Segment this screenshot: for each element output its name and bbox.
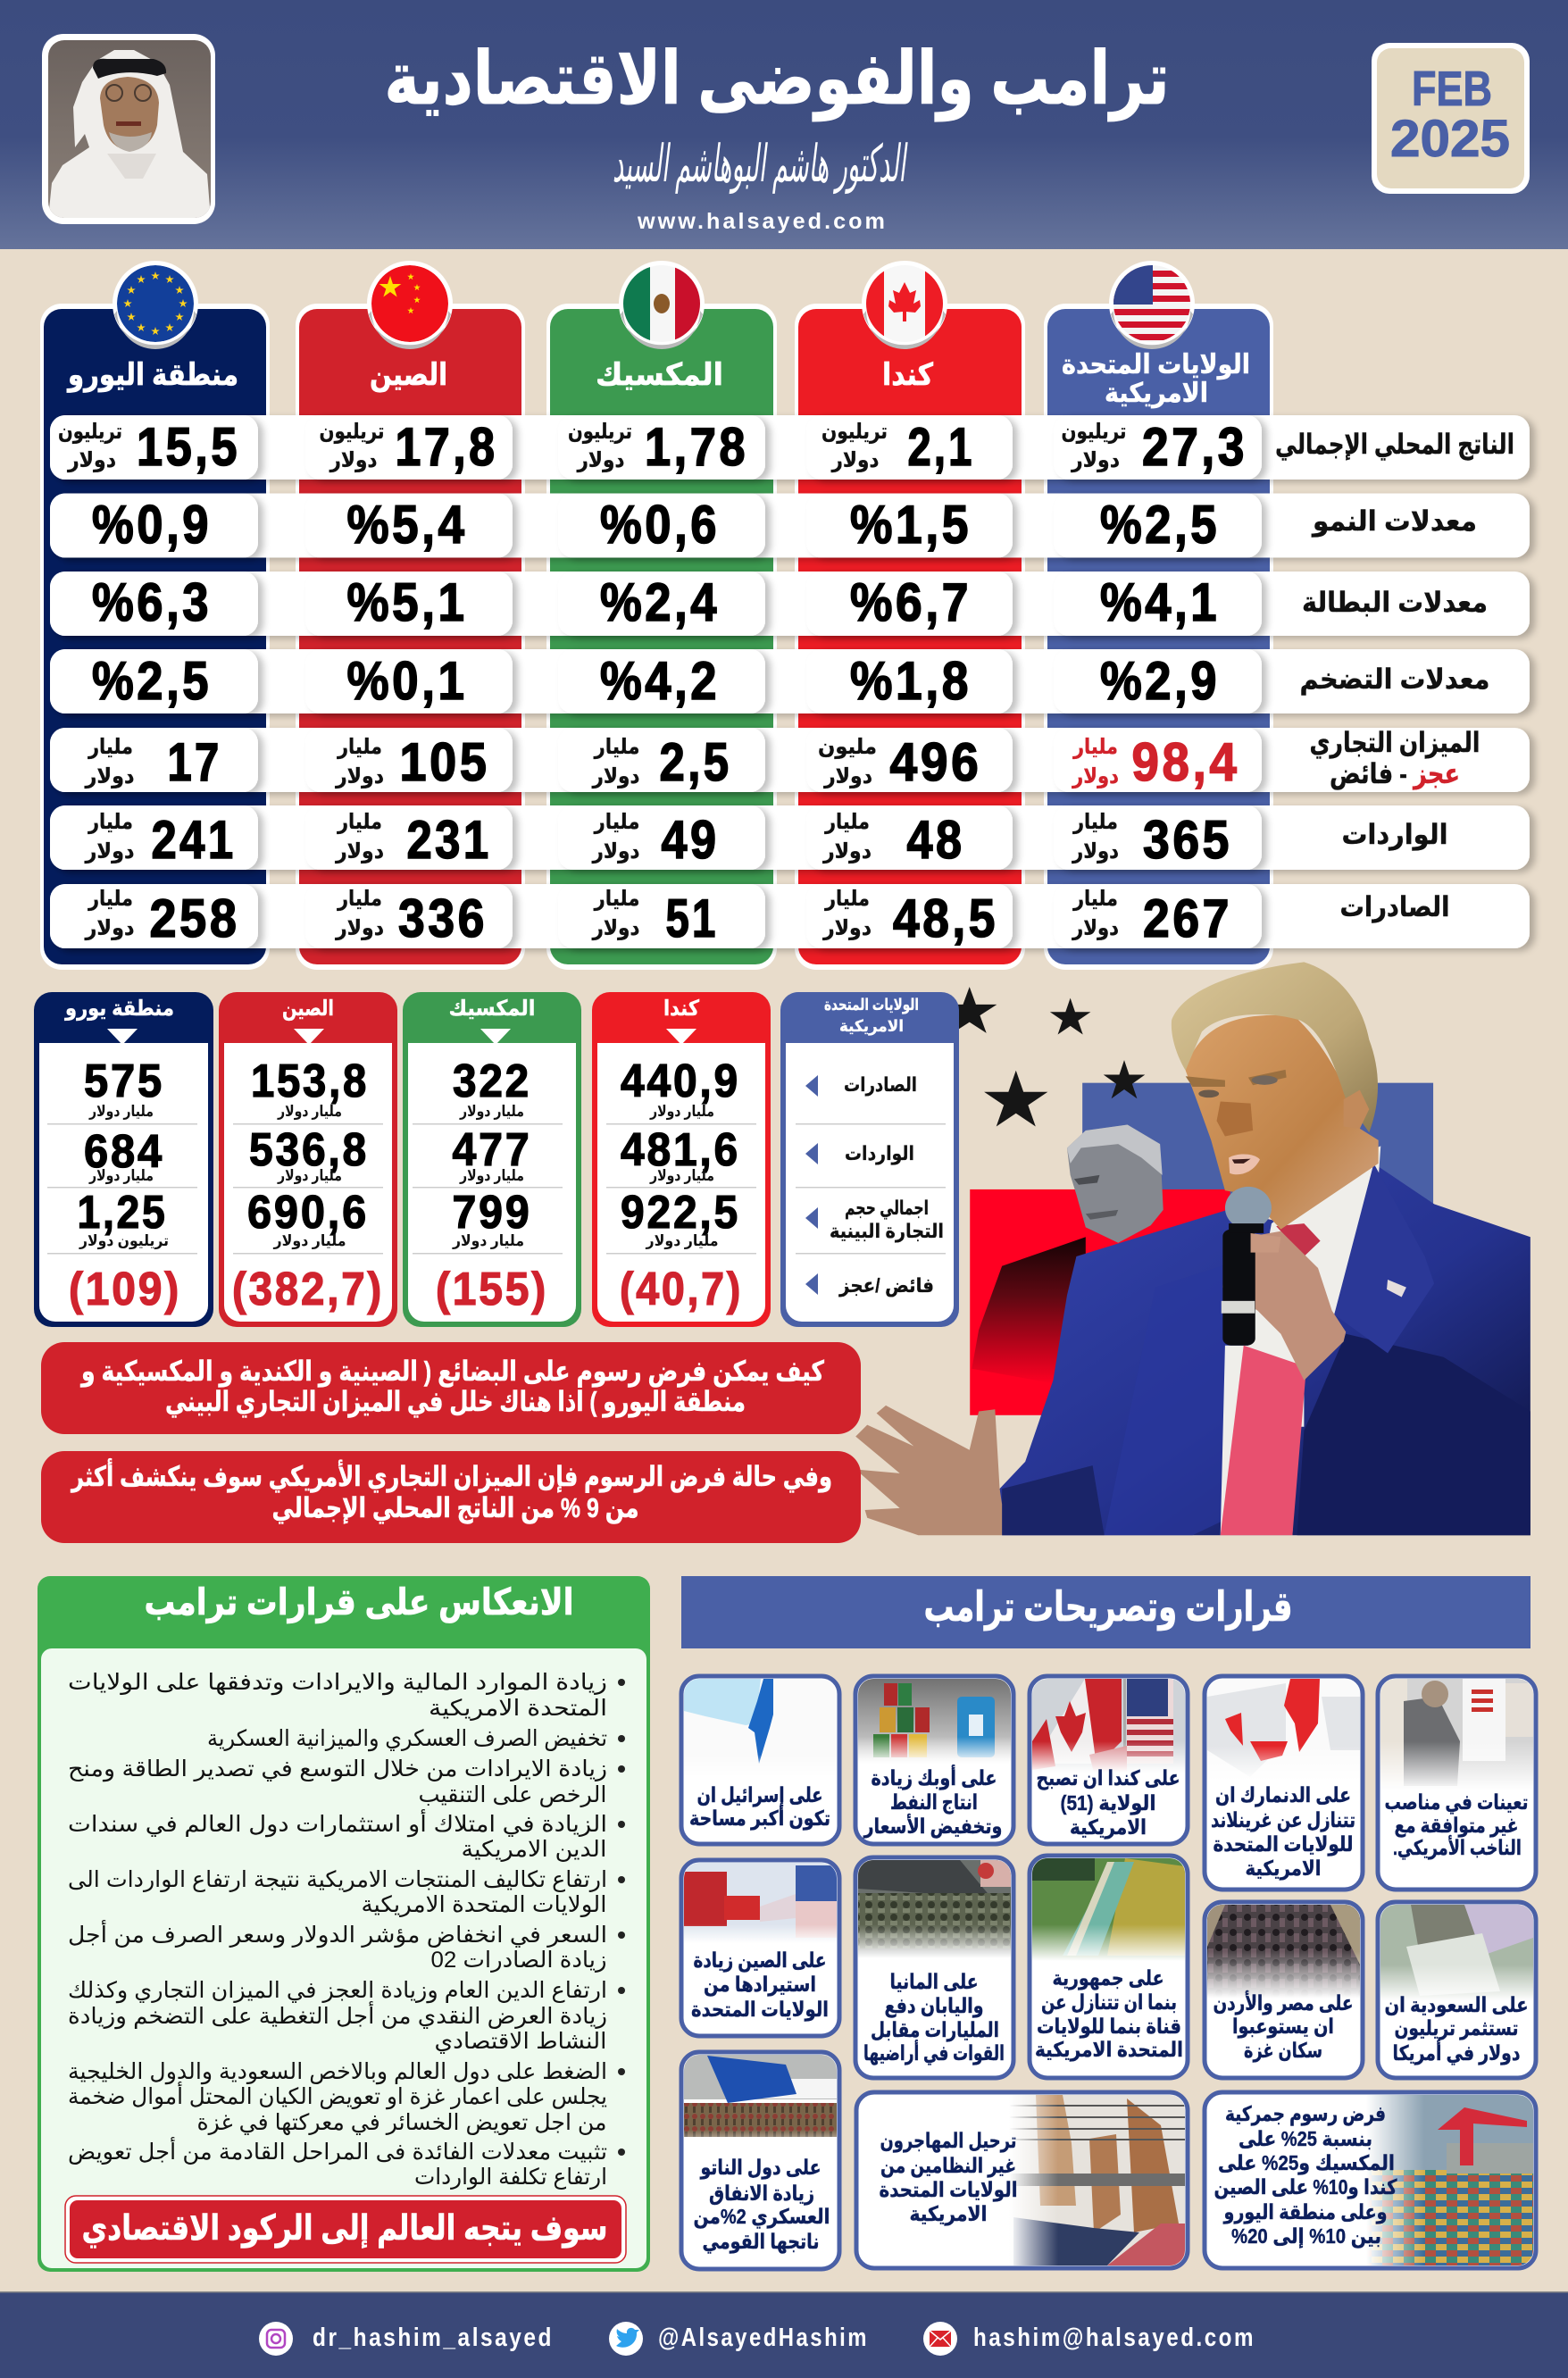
- table: mexico: مليار دولار: [459, 1167, 524, 1185]
- bullet list: تثبيت معدلات الفائدة فى المراحل القادمة من أجل تعويض: [68, 2136, 607, 2165]
- row 6: imports: دولار: [822, 839, 872, 864]
- icon: twitter: [609, 2322, 643, 2356]
- row 3: unemployment: [50, 572, 1530, 636]
- trade tables: [34, 992, 959, 1327]
- row 7: exports: مليار: [337, 887, 382, 911]
- row 6: imports: 231: [407, 810, 491, 870]
- bullet list: المتحدة الامريكية: [429, 1696, 607, 1721]
- card: deporting migrants: ترحيل المهاجرون: [880, 2129, 1016, 2153]
- row 1: gdp: [50, 415, 1530, 480]
- row 1: gdp: 17,8: [395, 417, 498, 477]
- panel: impact of decisions: [38, 1576, 650, 2272]
- column: united states: الولايات المتحدة: [1062, 350, 1250, 380]
- card: appointments: تعينات في مناصب: [1384, 1790, 1529, 1815]
- row 6: imports: دولار: [85, 839, 134, 864]
- row 7: exports: [50, 884, 1530, 948]
- card: appointments: [1378, 1676, 1536, 1890]
- card: opec: [855, 1676, 1013, 1844]
- table: usa labels: الولايات المتحدة: [824, 996, 919, 1014]
- row 5: trade balance: 496: [889, 732, 982, 792]
- card: saudi investment: على السعودية ان: [1384, 1993, 1529, 2017]
- row 1: gdp: 15,5: [137, 417, 240, 477]
- card: germany japan: القوات في أراضيها: [863, 2039, 1005, 2065]
- row 5: trade balance: دولار: [823, 764, 872, 788]
- flag: european union: [113, 261, 198, 349]
- date badge: FEB: [1412, 61, 1492, 116]
- row 3: unemployment: %4,1: [1100, 572, 1220, 632]
- row 3: unemployment: معدلات البطالة: [1302, 587, 1488, 618]
- heading: decisions and statements: قرارات وتصريحات ترامب: [923, 1583, 1293, 1631]
- card: nato: [681, 2052, 839, 2269]
- card: panama canal: المتحدة الامريكية: [1035, 2038, 1183, 2062]
- row 5: trade balance: دولار: [1072, 764, 1119, 788]
- row 7: exports: 336: [398, 889, 488, 948]
- row 7: exports: 267: [1143, 889, 1232, 948]
- row 7: exports: دولار: [85, 916, 134, 940]
- card: customs tariffs: [1205, 2092, 1536, 2268]
- row 4: inflation: %4,2: [600, 651, 720, 711]
- table: canada: كندا: [663, 997, 699, 1021]
- conclusion banner: [65, 2196, 626, 2263]
- row 5: trade balance: مليار: [1072, 735, 1118, 759]
- email address: hashim@halsayed.com: [973, 2324, 1255, 2352]
- table: china: مليار دولار: [277, 1167, 342, 1185]
- column: united states: الامريكية: [1105, 379, 1208, 408]
- card: china imports: على الصين زيادة: [693, 1948, 827, 1973]
- bullet list: تخفيض الصرف العسكري والميزانية العسكرية: [207, 1726, 607, 1752]
- table: usa labels: التجارة البينية: [830, 1220, 944, 1242]
- instagram handle: dr_hashim_alsayed: [313, 2324, 554, 2352]
- flag: china: [367, 261, 453, 349]
- card: germany japan: المليارات مقابل: [871, 2018, 999, 2042]
- card: opec: وتخفيض الأسعار: [863, 1813, 1002, 1839]
- card: saudi investment: [1378, 1902, 1536, 2078]
- row 5: trade balance: 17: [168, 732, 221, 792]
- column: canada: كندا: [882, 358, 933, 392]
- table: usa labels: اجمالي حجم: [845, 1197, 929, 1220]
- row 3: unemployment: %6,3: [92, 572, 212, 632]
- table: usa labels: الامريكية: [839, 1017, 904, 1036]
- card: opec: على أوبك زيادة: [872, 1764, 997, 1790]
- row 1: gdp: تريليون: [568, 420, 632, 444]
- card: egypt jordan: [1205, 1902, 1363, 2078]
- callout: tariffs question: [41, 1342, 861, 1434]
- row 2: growth: %1,5: [850, 495, 972, 555]
- row 1: gdp: دولار: [831, 448, 879, 472]
- table: usa labels: [780, 992, 959, 1327]
- row 5: trade balance: مليار: [337, 735, 382, 759]
- table: mexico: 799: [452, 1187, 532, 1239]
- row 5: trade balance: [50, 727, 1530, 792]
- bullet list: ارتفاع الدين العام وزيادة العجز في الميزان التجاري وكذلك: [68, 1978, 607, 2004]
- row 6: imports: دولار: [592, 839, 639, 864]
- table: mexico: 477: [452, 1124, 532, 1176]
- bullet list: زيادة العرض النقدي من أجل التغطية على التضخم وزيادة: [68, 2000, 607, 2030]
- row 2: growth: [50, 493, 1530, 557]
- table: china: [219, 992, 397, 1327]
- card: deporting migrants: غير النظامين من: [880, 2154, 1016, 2178]
- portrait photo: [42, 34, 215, 224]
- row 5: trade balance: 105: [400, 732, 489, 792]
- trump photo composition: [855, 962, 1530, 1535]
- table: euro zone: (109): [69, 1264, 181, 1315]
- row 5: trade balance: 2,5: [659, 732, 732, 792]
- date badge: [1372, 43, 1530, 194]
- footer: [0, 2291, 1568, 2378]
- row 7: exports: مليار: [594, 887, 639, 911]
- card: panama canal: بنما ان تتنازل عن: [1041, 1990, 1177, 2015]
- card: israel: [681, 1676, 839, 1844]
- bullet list: زيادة الايرادات من خلال التوسع في تصدير الطاقة ومنح: [68, 1756, 607, 1782]
- card: panama canal: على جمهورية: [1052, 1966, 1164, 1990]
- card: canada 51st state: على كندا ان تصبح: [1036, 1766, 1180, 1790]
- card: egypt jordan: سكان غزة: [1244, 2039, 1322, 2063]
- table: mexico: 322: [453, 1055, 531, 1107]
- row 7: exports: 258: [150, 889, 239, 948]
- comparison table: [40, 261, 1530, 970]
- column: china: [296, 304, 525, 970]
- column: euro zone: منطقة اليورو: [66, 358, 238, 393]
- row 1: gdp: 27,3: [1142, 417, 1247, 477]
- card: saudi investment: تستثمر تريليون: [1395, 2016, 1518, 2040]
- callout: trade balance warning: وفي حالة فرض الرسوم فإن الميزان التجاري الأمريكي سوف ينكشف أكثر: [70, 1458, 832, 1493]
- row 7: exports: دولار: [822, 916, 872, 940]
- row 4: inflation: %2,9: [1100, 651, 1220, 711]
- column: euro zone: [40, 304, 270, 970]
- panel heading: الانعكاس على قرارات ترامب: [145, 1581, 573, 1623]
- card: customs tariffs: المكسيك و25% على: [1218, 2151, 1395, 2175]
- card: israel: تكون أكبر مساحة: [689, 1804, 830, 1831]
- column: canada: [795, 304, 1025, 970]
- row 5: trade balance: الميزان التجاري: [1309, 727, 1480, 759]
- table: mexico: المكسيك: [448, 997, 536, 1021]
- table: canada: 440,9: [621, 1055, 740, 1107]
- card: germany japan: [855, 1857, 1013, 2078]
- twitter handle: @AlsayedHashim: [658, 2324, 869, 2352]
- row 1: gdp: تريليون: [58, 420, 122, 444]
- row 7: exports: مليار: [824, 887, 870, 911]
- row 6: imports: دولار: [335, 839, 384, 864]
- bullet list: زيادة الصادرات 02: [430, 1948, 607, 1973]
- row 5: trade balance: مليار: [88, 735, 133, 759]
- card: nato: العسكري 2%من: [693, 2205, 830, 2229]
- callout: tariffs question: منطقة اليورو ) اذا هناك خلل في الميزان التجاري البيني: [165, 1386, 746, 1418]
- card: deporting migrants: [856, 2092, 1188, 2268]
- row 5: trade balance: دولار: [592, 764, 639, 788]
- bullet list: الضغط على دول العالم وبالاخص السعودية والدول الخليجية: [68, 2059, 607, 2085]
- row 4: inflation: %1,8: [850, 651, 972, 711]
- row 5: trade balance: مليار: [594, 735, 639, 759]
- row 3: unemployment: %5,1: [346, 572, 468, 632]
- table: china: (382,7): [232, 1264, 384, 1315]
- row 4: inflation: %2,5: [92, 651, 212, 711]
- table: usa labels: فائض /عجز: [838, 1274, 934, 1297]
- table: usa labels: الصادرات: [844, 1073, 917, 1096]
- table: china: الصين: [282, 997, 334, 1021]
- column: china: الصين: [370, 358, 447, 393]
- card: customs tariffs: فرض رسوم جمركية: [1225, 2102, 1386, 2126]
- card: egypt jordan: ان يستوعبوا: [1232, 2015, 1334, 2039]
- table: euro zone: 684: [84, 1126, 164, 1178]
- row 1: gdp: دولار: [329, 448, 377, 472]
- card: canada 51st state: الامريكية: [1070, 1815, 1147, 1840]
- row 6: imports: 49: [661, 810, 720, 870]
- row 6: imports: 365: [1143, 810, 1232, 870]
- icon: instagram: [259, 2322, 293, 2356]
- bullet list: النشاط الاقتصادي: [434, 2029, 607, 2054]
- website: www.halsayed.com: [637, 209, 888, 234]
- row 1: gdp: 1,78: [645, 417, 748, 477]
- table: euro zone: 1,25: [77, 1187, 168, 1239]
- table: mexico: مليار دولار: [459, 1103, 524, 1121]
- row 7: exports: مليار: [1072, 887, 1118, 911]
- card: germany japan: واليابان دفع: [884, 1994, 984, 2018]
- row 7: exports: الصادرات: [1339, 891, 1450, 923]
- row 6: imports: مليار: [1072, 810, 1118, 834]
- bullet list: [68, 1670, 625, 2190]
- bullet list: من اجل تعويض الخسائر في معركتها في غزة: [196, 2110, 607, 2136]
- row 2: growth: %2,5: [1100, 495, 1220, 555]
- row 1: gdp: دولار: [577, 448, 625, 472]
- row 7: exports: دولار: [592, 916, 639, 940]
- card: appointments: الناخب الأمريكي.: [1393, 1834, 1522, 1860]
- card: customs tariffs: وعلى منطقة اليورو: [1223, 2200, 1388, 2224]
- callout: trade balance warning: [41, 1451, 861, 1543]
- header band: [0, 0, 1568, 249]
- flag: usa: [1109, 261, 1195, 349]
- row 5: trade balance: مليون: [818, 735, 877, 759]
- card: china imports: استيرادها من: [704, 1973, 816, 1997]
- callout: trade balance warning: من 9 % من الناتج المحلي الإجمالي: [271, 1492, 639, 1524]
- row 1: gdp: دولار: [1071, 448, 1120, 472]
- row 4: inflation: معدلات التضخم: [1300, 663, 1489, 696]
- row 7: exports: دولار: [1072, 916, 1119, 940]
- table: euro zone: مليار دولار: [88, 1167, 154, 1185]
- row 2: growth: %0,9: [92, 495, 212, 555]
- row 2: growth: %0,6: [600, 495, 720, 555]
- row 2: growth: %5,4: [346, 495, 468, 555]
- row 7: exports: دولار: [335, 916, 384, 940]
- column: mexico: [546, 304, 777, 970]
- bullet list: الولايات المتحدة الامريكية: [361, 1892, 607, 1917]
- bullet list: الزيادة في امتلاك أو استثمارات دول العالم في سندات: [68, 1808, 607, 1838]
- card: nato: على دول الناتو: [700, 2156, 822, 2180]
- card: customs tariffs: كندا و10% على الصين: [1214, 2175, 1397, 2199]
- card: denmark greenland: الامريكية: [1245, 1857, 1322, 1881]
- table: euro zone: مليار دولار: [88, 1103, 154, 1121]
- row 6: imports: مليار: [88, 810, 133, 834]
- table: mexico: [403, 992, 581, 1327]
- row 7: exports: 51: [666, 889, 718, 948]
- table: euro zone: [34, 992, 213, 1327]
- card: appointments: غير متوافقة مع: [1395, 1814, 1518, 1838]
- date badge: 2025: [1390, 110, 1510, 168]
- card: israel: على إسرائيل ان: [696, 1783, 823, 1807]
- flag: canada: [862, 261, 947, 349]
- row 7: exports: 48,5: [893, 889, 998, 948]
- bullet list: ارتفاع تكاليف المنتجات الامريكية نتيجة ارتفاع الواردات الى: [68, 1867, 607, 1892]
- row 1: gdp: 2,1: [907, 417, 975, 477]
- card: nato: ناتجها القومي: [702, 2230, 820, 2254]
- title: ترامب والفوضى الاقتصادية: [384, 38, 1170, 122]
- card: egypt jordan: على مصر والأردن: [1213, 1990, 1354, 2015]
- card: germany japan: على المانيا: [889, 1970, 979, 1993]
- table: canada: مليار دولار: [649, 1103, 714, 1121]
- table: mexico: مليار دولار: [452, 1232, 524, 1250]
- card: panama canal: [1030, 1856, 1188, 2078]
- table: usa labels: الواردات: [845, 1142, 914, 1165]
- table: china: مليار دولار: [273, 1232, 346, 1250]
- row 5: trade balance: دولار: [335, 764, 384, 788]
- bullet list: ارتفاع تكلفة الواردات: [414, 2165, 607, 2190]
- column: united states: [1044, 304, 1273, 970]
- bullet list: السعر في انخفاض مؤشر الدولار وسعر الصرف من أجل: [68, 1919, 607, 1948]
- card: canada 51st state: الولاية (51): [1061, 1791, 1155, 1815]
- table: mexico: (155): [436, 1264, 548, 1315]
- row 6: imports: [50, 805, 1530, 870]
- table: china: 690,6: [247, 1187, 369, 1239]
- table: canada: (40,7): [620, 1264, 743, 1315]
- row 4: inflation: [50, 649, 1530, 713]
- row 6: imports: مليار: [594, 810, 639, 834]
- row 1: gdp: دولار: [67, 448, 116, 472]
- table: canada: [592, 992, 771, 1327]
- row 3: unemployment: %2,4: [600, 572, 720, 632]
- column: mexico: المكسيك: [596, 358, 723, 392]
- card: deporting migrants: الامريكية: [909, 2202, 988, 2226]
- row 6: imports: مليار: [337, 810, 382, 834]
- table: china: مليار دولار: [277, 1103, 342, 1121]
- table: canada: 481,6: [621, 1124, 740, 1176]
- row 6: imports: 48: [907, 810, 964, 870]
- card: denmark greenland: على الدنمارك ان: [1215, 1783, 1351, 1807]
- row 3: unemployment: %6,7: [850, 572, 972, 632]
- card: denmark greenland: تتنازل عن غرينلاند: [1211, 1808, 1355, 1832]
- table: china: 536,8: [249, 1124, 369, 1176]
- row 5: trade balance: دولار: [85, 764, 134, 788]
- table: canada: 922,5: [621, 1187, 740, 1239]
- row 5: trade balance: 98,4: [1132, 732, 1239, 792]
- row 6: imports: 241: [152, 810, 236, 870]
- row 6: imports: الواردات: [1341, 819, 1448, 851]
- card: canada 51st state: [1030, 1676, 1188, 1844]
- row 1: gdp: تريليون: [1061, 420, 1127, 444]
- calligraphic signature: الدكتور هاشم البوهاشم السيد: [613, 137, 908, 194]
- card: china imports: الولايات المتحدة: [691, 1998, 829, 2022]
- card: denmark greenland: [1205, 1676, 1363, 1890]
- table: china: 153,8: [251, 1055, 369, 1107]
- row 1: gdp: تريليون: [320, 420, 384, 444]
- callout: tariffs question: كيف يمكن فرض رسوم على البضائع ( الصينية و الكندية و المكسيكية و: [79, 1356, 825, 1388]
- card: panama canal: قناة بنما للولايات: [1037, 2015, 1181, 2039]
- row 6: imports: مليار: [824, 810, 870, 834]
- row 5: trade balance: عجز - فائض: [1330, 758, 1460, 790]
- row 1: gdp: تريليون: [822, 420, 888, 444]
- table: canada: مليار دولار: [649, 1167, 714, 1185]
- card: china imports: [681, 1860, 839, 2036]
- card: opec: انتاج النفط: [890, 1790, 978, 1815]
- table: euro zone: 575: [84, 1055, 164, 1107]
- card: nato: زيادة الانفاق: [709, 2182, 814, 2206]
- heading: decisions and statements: [681, 1576, 1530, 1648]
- icon: email: [923, 2322, 957, 2356]
- row 4: inflation: %0,1: [346, 651, 468, 711]
- row 6: imports: دولار: [1072, 839, 1119, 864]
- conclusion banner: سوف يتجه العالم إلى الركود الاقتصادي: [82, 2209, 607, 2249]
- card: customs tariffs: بنسبة 25% على: [1239, 2127, 1372, 2150]
- bullet list: يجلس على اعمار غزة او تعويض الكيان المحتل أموال ضخمة: [68, 2081, 607, 2110]
- bullet list: الرخص على التنقيب: [418, 1782, 607, 1807]
- bullet list: زيادة الموارد المالية والايرادات وتدفقها على الولايات: [68, 1670, 607, 1696]
- card: denmark greenland: للولايات المتحدة: [1213, 1832, 1354, 1857]
- flag: mexico: [619, 261, 705, 349]
- bullet list: الدين الامريكية: [461, 1837, 607, 1862]
- table: canada: مليار دولار: [646, 1232, 718, 1250]
- card: customs tariffs: بين 10% إلى 20%: [1231, 2224, 1381, 2249]
- row 7: exports: مليار: [88, 887, 133, 911]
- row 2: growth: معدلات النمو: [1311, 505, 1477, 538]
- table: euro zone: منطقة يورو: [64, 997, 174, 1021]
- table: euro zone: تريليون دولار: [79, 1232, 169, 1250]
- card: deporting migrants: الولايات المتحدة: [879, 2178, 1018, 2202]
- card: saudi investment: دولار في أمريكا: [1393, 2039, 1521, 2065]
